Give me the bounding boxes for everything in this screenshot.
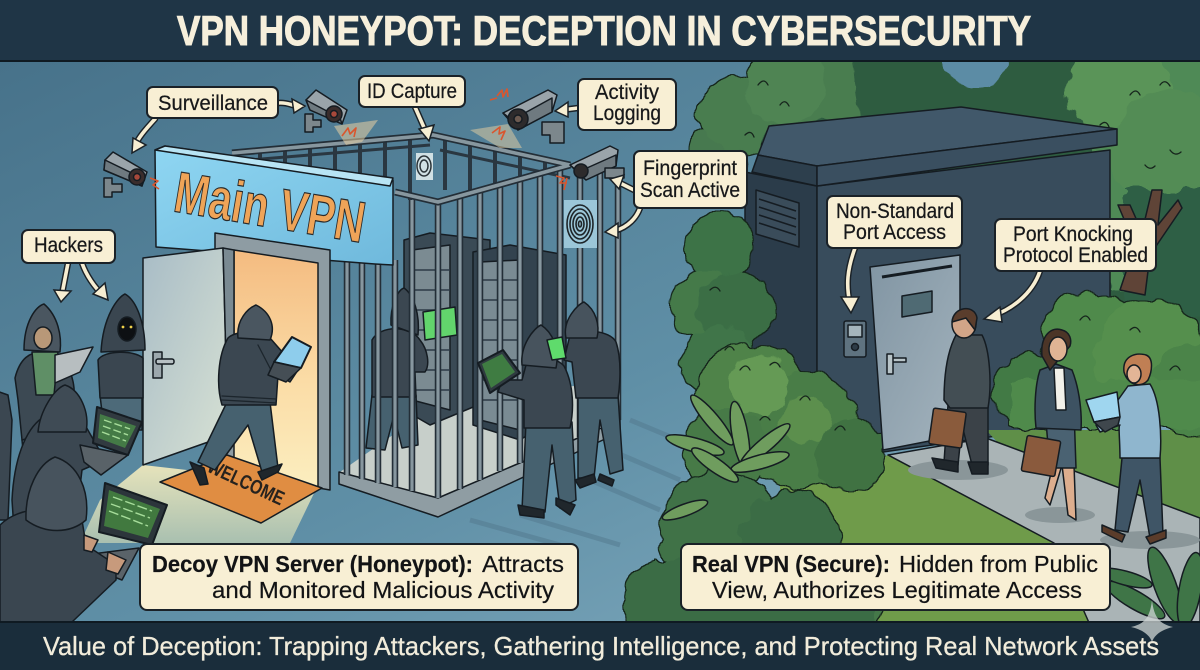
panel: decoy VPN caption: and Monitored Malicious Activity [212, 577, 555, 603]
panel: real VPN caption [681, 544, 1110, 610]
label: Non-Standard Port Access: Port Access [843, 221, 946, 244]
person: man with laptop [1086, 354, 1166, 544]
person: man entering with briefcase [929, 309, 990, 474]
label: Non-Standard Port Access: Non-Standard [836, 200, 954, 223]
steel door of the real VPN [870, 255, 960, 450]
leafy plant in foreground [660, 391, 794, 524]
panel: real VPN caption: View, Authorizes Legitimate Access [712, 577, 1082, 603]
decoy cage: front bars and rim [232, 135, 620, 517]
fingerprint scanner panel [564, 200, 597, 248]
main VPN sign text: Main VPN [170, 160, 370, 256]
footer banner [0, 621, 1200, 670]
person: woman with briefcase [1021, 329, 1081, 520]
welcome mat: WELCOME [204, 456, 288, 510]
label: Fingerprint Scan Active [634, 151, 747, 208]
lower right fern plant [1096, 544, 1200, 629]
panel: real VPN caption: Hidden from Public [899, 551, 1098, 577]
label: Non-Standard Port Access [827, 196, 962, 248]
security camera: on cage corner [556, 146, 624, 190]
sparkle watermark [1131, 600, 1173, 642]
label: Activity Logging [578, 79, 676, 130]
grass and footpath [780, 430, 1200, 625]
label: ID Capture: ID Capture [367, 80, 457, 103]
hacker at far left edge [0, 390, 12, 520]
hacker group: seated with laptop [12, 385, 142, 530]
label: Surveillance: Surveillance [158, 92, 268, 115]
title banner [0, 0, 1200, 62]
footer banner: Value of Deception: Trapping Attackers, Gathering Intelligence, and Protecting Real Network Assets [43, 631, 1159, 661]
label: ID Capture [359, 76, 465, 107]
hacker inside the cage [366, 288, 457, 450]
keypad beside the door [844, 321, 866, 357]
label: Surveillance [147, 87, 278, 118]
label: Hackers [22, 230, 115, 263]
hacker group: foreground with laptop [0, 457, 167, 622]
security camera: left [104, 152, 159, 197]
right bushes behind the staff [994, 292, 1200, 436]
background forest canopy [689, 14, 1200, 360]
label: Port Knocking Protocol Enabled: Protocol Enabled [1003, 244, 1148, 267]
panel: real VPN caption: Real VPN (Secure): [692, 551, 890, 577]
light spilling from door onto floor [80, 465, 318, 543]
bunker: real VPN server building [745, 107, 1117, 452]
welcome mat [160, 455, 322, 523]
floor shadow stripes right of the cage [470, 420, 690, 545]
panel: decoy VPN caption: Attracts [482, 551, 564, 577]
open decoy door [143, 248, 234, 465]
lower hedge [625, 470, 886, 640]
panel: decoy VPN caption [140, 544, 578, 610]
hacker at cage with laptop [478, 325, 576, 518]
label: Port Knocking Protocol Enabled [995, 219, 1156, 271]
label: Port Knocking Protocol Enabled: Port Knocking [1013, 223, 1133, 246]
label: Fingerprint Scan Active: Scan Active [640, 179, 740, 202]
main VPN sign and doorway [155, 146, 393, 490]
label: Fingerprint Scan Active: Fingerprint [643, 157, 737, 180]
security camera: top right [470, 89, 564, 148]
hacker group: back pair [15, 294, 145, 480]
security camera: top centre [305, 90, 378, 145]
hacker walking through the door [190, 305, 311, 485]
fingerprint panel on back of cage [416, 153, 433, 180]
foliage ink marks [710, 81, 1181, 430]
label: Hackers: Hackers [34, 234, 103, 257]
left bush beside bunker [671, 211, 773, 403]
label: Activity Logging: Logging [593, 102, 661, 125]
panel: decoy VPN caption: Decoy VPN Server (Honeypot): [152, 551, 473, 577]
title banner: VPN HONEYPOT: DECEPTION IN CYBERSECURITY [177, 7, 1031, 54]
server racks inside the cage [404, 233, 566, 440]
big foreground bush [683, 344, 886, 492]
tree trunk behind the bunker [1118, 190, 1182, 295]
arrows linking labels to scene [54, 99, 1040, 322]
decoy cage: rear bars and floor [250, 137, 620, 498]
hacker with green tablet [547, 302, 623, 488]
label: Activity Logging: Activity [595, 81, 659, 104]
